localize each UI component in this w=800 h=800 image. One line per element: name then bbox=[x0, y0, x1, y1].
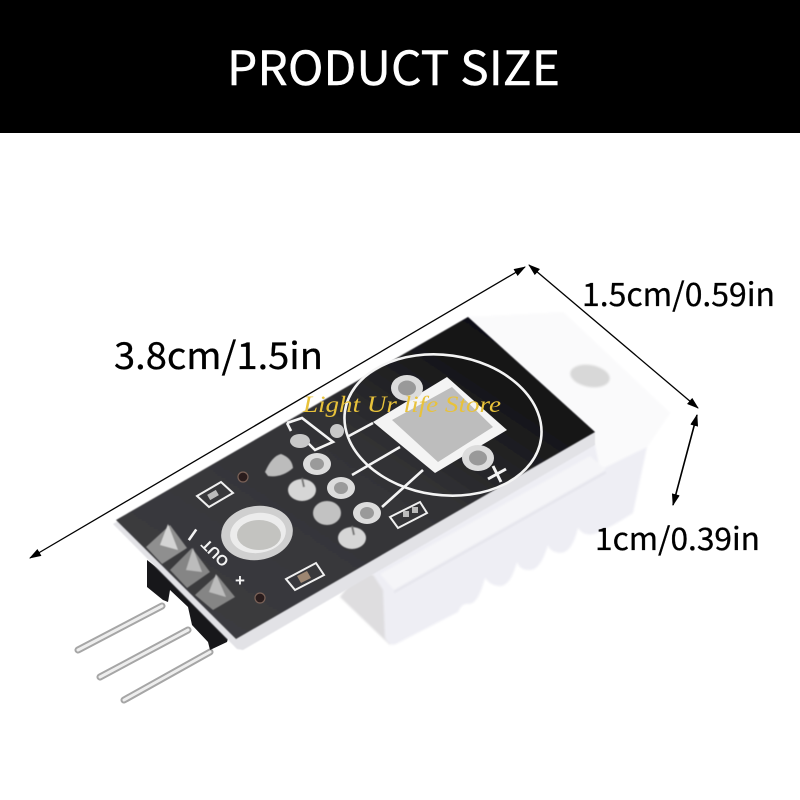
label: length: 3.8cm/1.5in bbox=[114, 326, 323, 380]
board markings: + bbox=[235, 571, 245, 590]
solder joints bbox=[265, 454, 366, 549]
ring pads bbox=[290, 375, 494, 524]
product: sensor module bbox=[78, 312, 670, 700]
label: height: 1cm/0.39in bbox=[595, 514, 760, 559]
pins bbox=[78, 606, 210, 700]
title: PRODUCT SIZE bbox=[227, 30, 560, 99]
header solder pads bbox=[146, 524, 235, 610]
header band bbox=[0, 0, 800, 133]
dimension arrow: height bbox=[673, 415, 697, 505]
mounting ring bbox=[218, 501, 296, 565]
sensor pad bbox=[373, 377, 507, 473]
small holes bbox=[238, 472, 248, 482]
circuit board bbox=[113, 317, 595, 650]
board markings: OUT bbox=[198, 535, 233, 570]
dimension arrow: width bbox=[529, 265, 698, 408]
watermark: Light Ur life Store bbox=[302, 392, 501, 417]
board markings bbox=[188, 529, 245, 590]
plus mark bbox=[488, 466, 506, 482]
label: width: 1.5cm/0.59in bbox=[582, 270, 775, 316]
pin header bbox=[147, 560, 232, 650]
dimension arrow: length bbox=[30, 267, 525, 558]
housing bbox=[340, 312, 670, 645]
smd footprints bbox=[197, 482, 427, 590]
silkscreen traces bbox=[287, 342, 551, 508]
